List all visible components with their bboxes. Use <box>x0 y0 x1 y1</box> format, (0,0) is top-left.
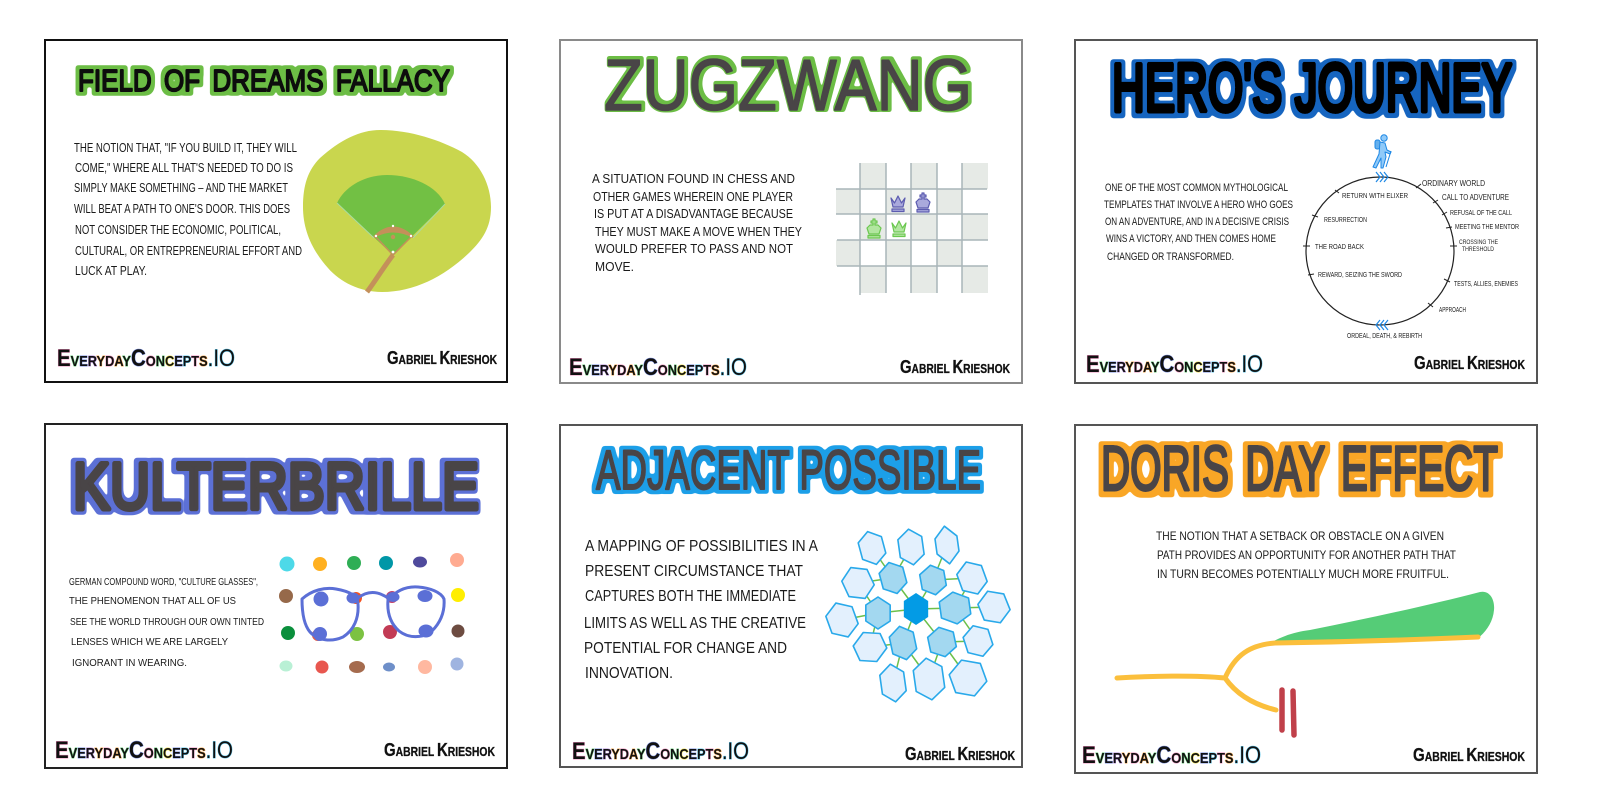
title: Zugzwang: ZUGZWANG <box>604 46 972 126</box>
labels: journey stages: THRESHOLD <box>1462 246 1494 253</box>
labels: journey stages: RETURN WITH ELIXER <box>1342 193 1408 200</box>
text block: definition <box>69 576 264 669</box>
text block: definition <box>74 141 302 278</box>
author: GABRIEL KRIESHOK <box>1414 353 1525 373</box>
text block: definition: THE NOTION THAT A SETBACK OR OBSTACLE ON A GIVEN <box>1156 529 1444 543</box>
panel: Adjacent Possible <box>560 425 1022 767</box>
author: GABRIEL KRIESHOK <box>387 348 497 368</box>
title: Adjacent Possible: ADJACENT POSSIBLE <box>596 438 981 501</box>
icon: green king <box>867 219 881 238</box>
text block: definition: WILL BEAT A PATH TO ONE'S DOOR. THIS DOES <box>74 202 290 216</box>
text block: definition: CULTURAL, OR ENTREPRENEURIAL EFFORT AND <box>75 244 302 258</box>
text block: definition: LIMITS AS WELL AS THE CREATIVE <box>584 615 806 632</box>
icon: blue queen <box>891 196 905 212</box>
diagram: forked path with obstacle <box>1117 592 1494 735</box>
text block: definition: IS PUT AT A DISADVANTAGE BECAUSE <box>594 207 793 221</box>
panel: Doris Day Effect <box>1075 425 1537 773</box>
text block: definition <box>592 172 803 274</box>
labels: journey stages: CALL TO ADVENTURE <box>1442 193 1509 202</box>
text block: definition: COME," WHERE ALL THAT'S NEEDED TO DO IS <box>75 161 293 175</box>
text block: definition: NOT CONSIDER THE ECONOMIC, POLITICAL, <box>75 223 281 237</box>
text block: definition: LUCK AT PLAY. <box>75 264 147 278</box>
text block: definition: ONE OF THE MOST COMMON MYTHOLOGICAL <box>1105 182 1288 194</box>
icon: chevrons forward <box>1376 172 1388 182</box>
author: GABRIEL KRIESHOK <box>905 744 1015 764</box>
logo: EVERYDAYCONCEPTS.IO <box>569 354 747 381</box>
icon: chevrons back <box>1376 320 1388 330</box>
text block: definition <box>1104 182 1293 263</box>
text block: definition: TEMPLATES THAT INVOLVE A HERO WHO GOES <box>1104 199 1293 211</box>
labels: journey stages: REFUSAL OF THE CALL <box>1450 210 1512 217</box>
text block: definition: WOULD PREFER TO PASS AND NOT <box>595 242 793 256</box>
labels: journey stages: RESURRECTION <box>1324 217 1367 224</box>
title: Field of Dreams Fallacy: FIELD OF DREAMS FALLACY <box>78 63 450 98</box>
logo: EVERYDAYCONCEPTS.IO <box>57 345 235 372</box>
diagram: network of hexagons <box>823 525 1013 703</box>
illustration: baseball field <box>303 130 491 292</box>
panel: Field of Dreams Fallacy <box>45 40 507 382</box>
text block: definition: ON AN ADVENTURE, AND IN A DECISIVE CRISIS <box>1105 216 1289 228</box>
text block: definition: PATH PROVIDES AN OPPORTUNITY FOR ANOTHER PATH THAT <box>1157 548 1457 562</box>
illustration: colored dots seen through glasses <box>279 553 465 674</box>
text block: definition: IGNORANT IN WEARING. <box>72 657 187 669</box>
text block: definition: THEY MUST MAKE A MOVE WHEN THEY <box>595 225 803 239</box>
labels: journey stages: REWARD, SEIZING THE SWORD <box>1318 272 1402 279</box>
labels: journey stages <box>1315 178 1519 340</box>
green opportunity area <box>1270 592 1494 643</box>
hexagons: inner ring <box>866 559 972 662</box>
logo: EVERYDAYCONCEPTS.IO <box>1086 351 1263 378</box>
yellow path <box>1117 637 1478 710</box>
text block: definition: IN TURN BECOMES POTENTIALLY MUCH MORE FRUITFUL. <box>1157 567 1449 581</box>
icon: glasses <box>302 587 444 640</box>
icon: hiker <box>1373 135 1391 168</box>
text block: definition <box>584 538 818 682</box>
diagram: hero's journey circle <box>1303 135 1519 340</box>
logo: EVERYDAYCONCEPTS.IO <box>55 737 233 764</box>
red obstacle bars <box>1282 690 1294 735</box>
text block: definition: A SITUATION FOUND IN CHESS AND <box>592 172 795 186</box>
logo: EVERYDAYCONCEPTS.IO <box>572 738 749 765</box>
icon: blue king <box>916 193 930 212</box>
author: GABRIEL KRIESHOK <box>384 740 495 760</box>
text block: definition: LENSES WHICH WE ARE LARGELY <box>71 636 228 648</box>
panel: Zugzwang <box>560 40 1022 383</box>
labels: journey stages: ORDINARY WORLD <box>1422 178 1485 188</box>
text block: definition: THE NOTION THAT, "IF YOU BUILD IT, THEY WILL <box>74 141 297 155</box>
panel: Kulterbrille <box>45 424 507 768</box>
text block: definition: THE PHENOMENON THAT ALL OF US <box>69 595 236 607</box>
text block: definition: INNOVATION. <box>585 665 673 682</box>
text block: definition: CAPTURES BOTH THE IMMEDIATE <box>585 588 796 605</box>
text block: definition: WINS A VICTORY, AND THEN COMES HOME <box>1106 233 1276 245</box>
hexagons: outer possibilities <box>823 525 1013 703</box>
text block: definition: OTHER GAMES WHEREIN ONE PLAYER <box>593 190 793 204</box>
text block: definition: SIMPLY MAKE SOMETHING – AND THE MARKET <box>74 181 288 195</box>
labels: journey stages: TESTS, ALLIES, ENEMIES <box>1454 281 1518 288</box>
text block: definition: MOVE. <box>595 260 634 274</box>
text block: definition: A MAPPING OF POSSIBILITIES IN A <box>585 538 818 555</box>
labels: journey stages: MEETING THE MENTOR <box>1455 224 1519 231</box>
text block: definition: POTENTIAL FOR CHANGE AND <box>584 640 787 657</box>
logo: EVERYDAYCONCEPTS.IO <box>1082 742 1261 769</box>
author: GABRIEL KRIESHOK <box>900 357 1010 377</box>
text block: definition: PRESENT CIRCUMSTANCE THAT <box>585 563 803 580</box>
labels: journey stages: CROSSING THE <box>1459 239 1499 246</box>
text block: definition: GERMAN COMPOUND WORD, "CULTURE GLASSES", <box>69 576 258 588</box>
labels: journey stages: APPROACH <box>1439 307 1466 314</box>
labels: journey stages: THE ROAD BACK <box>1315 244 1364 251</box>
title: Kulterbrille: KULTERBRILLE <box>73 449 479 523</box>
text block: definition: CHANGED OR TRANSFORMED. <box>1107 251 1234 263</box>
panel: Hero's Journey <box>1075 40 1537 383</box>
text block: definition: SEE THE WORLD THROUGH OUR OWN TINTED <box>70 616 264 628</box>
illustration: chess board <box>836 163 988 295</box>
labels: journey stages: ORDEAL, DEATH, & REBIRTH <box>1347 333 1422 340</box>
author: GABRIEL KRIESHOK <box>1413 745 1525 765</box>
hexagon: center <box>904 593 928 625</box>
text block: definition <box>1156 529 1457 581</box>
icon: green queen <box>892 221 906 236</box>
